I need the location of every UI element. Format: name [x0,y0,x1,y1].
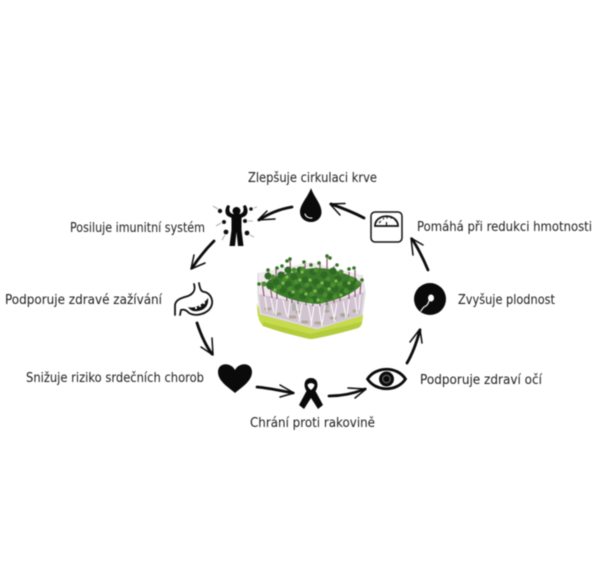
dark leaves [268,270,354,299]
label: Chrání proti rakovině: Chrání proti rakovině [250,416,375,431]
label: Zlepšuje cirkulaci krve: Zlepšuje cirkulaci krve [248,171,377,186]
arrow: drop to person [258,207,292,220]
arrow: scale to drop [330,204,364,218]
green tray [257,303,363,339]
icon: stomach [175,283,212,315]
clear box with roots [258,262,365,329]
tallest leaves [259,256,362,284]
label: Posiluje imunitní systém: Posiluje imunitní systém [70,221,205,236]
central image: microgreens in a tray [257,256,365,339]
medium leaves [264,269,358,301]
icon: sperm in egg [414,283,446,315]
icon: awareness ribbon [299,378,323,409]
arrow: person to stomach [191,241,214,269]
purple stems [262,256,361,306]
soil and seed husks [266,309,356,323]
arrow: sperm to scale [411,238,428,270]
arrow: eye to sperm [407,329,422,363]
icon: blood drop [300,188,322,222]
label: Podporuje zdravé zažívání: Podporuje zdravé zažívání [5,293,162,308]
icon: heart [218,364,252,393]
icon: eye [368,369,406,389]
label: Podporuje zdraví očí: Podporuje zdraví očí [420,373,542,388]
label: Zvyšuje plodnost: Zvyšuje plodnost [458,293,555,308]
white roots [265,295,360,326]
arrow: ribbon to eye [329,388,366,398]
arrow: heart to ribbon [257,385,294,397]
icon: weighing scale [371,212,402,242]
icon: strong person with immune particles [213,205,257,246]
arrow: stomach to heart [197,323,213,355]
light leaves [275,272,349,300]
foliage mass [265,268,361,304]
label: Snižuje riziko srdečních chorob: Snižuje riziko srdečních chorob [26,371,204,386]
